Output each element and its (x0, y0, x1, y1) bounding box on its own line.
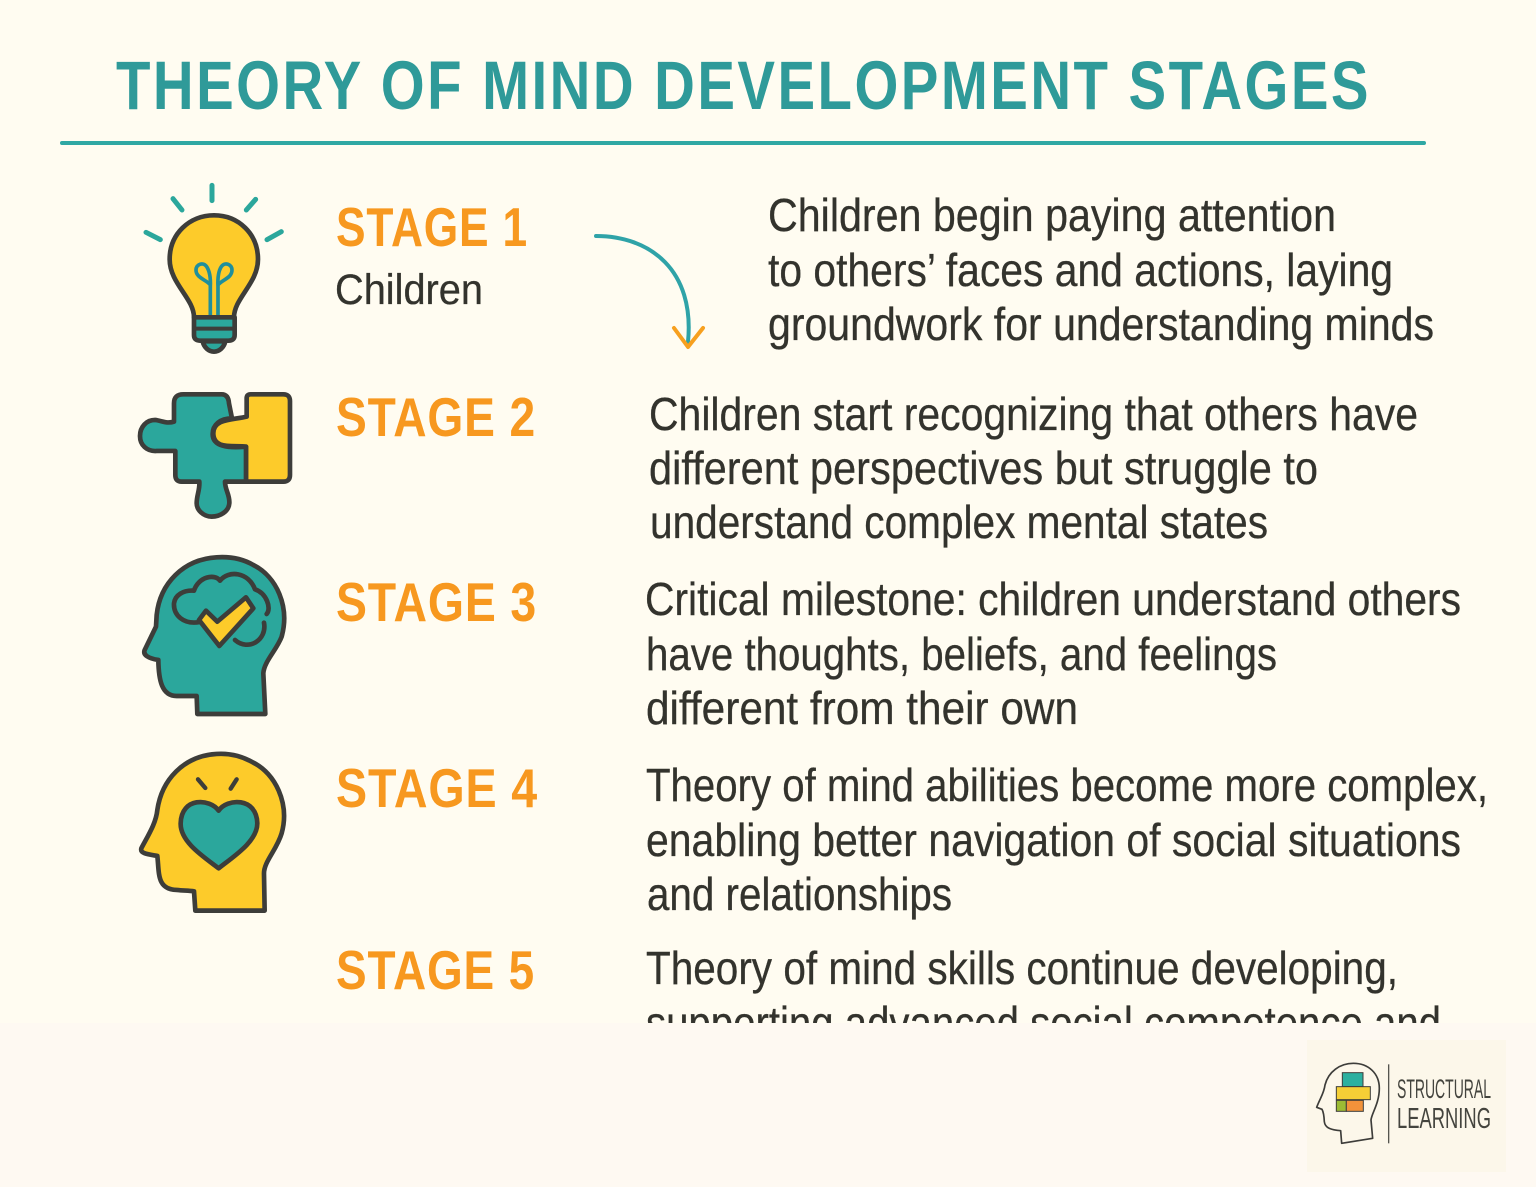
stage 1: description: Children begin paying attention (768, 189, 1336, 241)
stage 1: description: to others’ faces and actions, laying (768, 244, 1393, 296)
stage 5: description: supporting advanced social competence and (646, 997, 1441, 1049)
stage 3: description (645, 573, 1461, 734)
stage 5: description: Theory of mind skills continue developing, (646, 942, 1398, 994)
stage 5: label: STAGE 5 (336, 939, 535, 1001)
stage 3: description: have thoughts, beliefs, and feelings (646, 628, 1277, 680)
icon: head with heart (141, 754, 284, 911)
stage 2: description (649, 388, 1418, 548)
stage 1: label: Children (335, 266, 483, 314)
stage 4: description (646, 759, 1488, 920)
stage 4: label: STAGE 4 (336, 757, 538, 819)
stage 2: description: different perspectives but struggle to (649, 442, 1318, 494)
stage 2: description: Children start recognizing that others have (649, 388, 1418, 440)
icon: head with brain and check (144, 557, 284, 714)
icon: puzzle pieces (140, 394, 290, 517)
logo: Structural Learning (1307, 1040, 1506, 1172)
stage 5: description (646, 942, 1441, 1049)
stage 1: label: STAGE 1 (336, 196, 528, 258)
stage 3: label: STAGE 3 (336, 571, 537, 633)
bottom band covering cut-off text (0, 1023, 1536, 1187)
stage 4: description: enabling better navigation of social situations (646, 814, 1461, 866)
arrow: stage 1 to description (596, 236, 703, 347)
stage 2: description: understand complex mental states (650, 496, 1268, 548)
stage 1: description: groundwork for understanding minds (768, 298, 1434, 350)
stage 1: description (768, 189, 1434, 350)
stage 1: label (335, 196, 528, 314)
stage 3: description: different from their own (646, 682, 1078, 734)
icon: light bulb (146, 185, 281, 352)
stage 4: description: and relationships (647, 868, 952, 920)
stage 2: label: STAGE 2 (336, 386, 536, 448)
